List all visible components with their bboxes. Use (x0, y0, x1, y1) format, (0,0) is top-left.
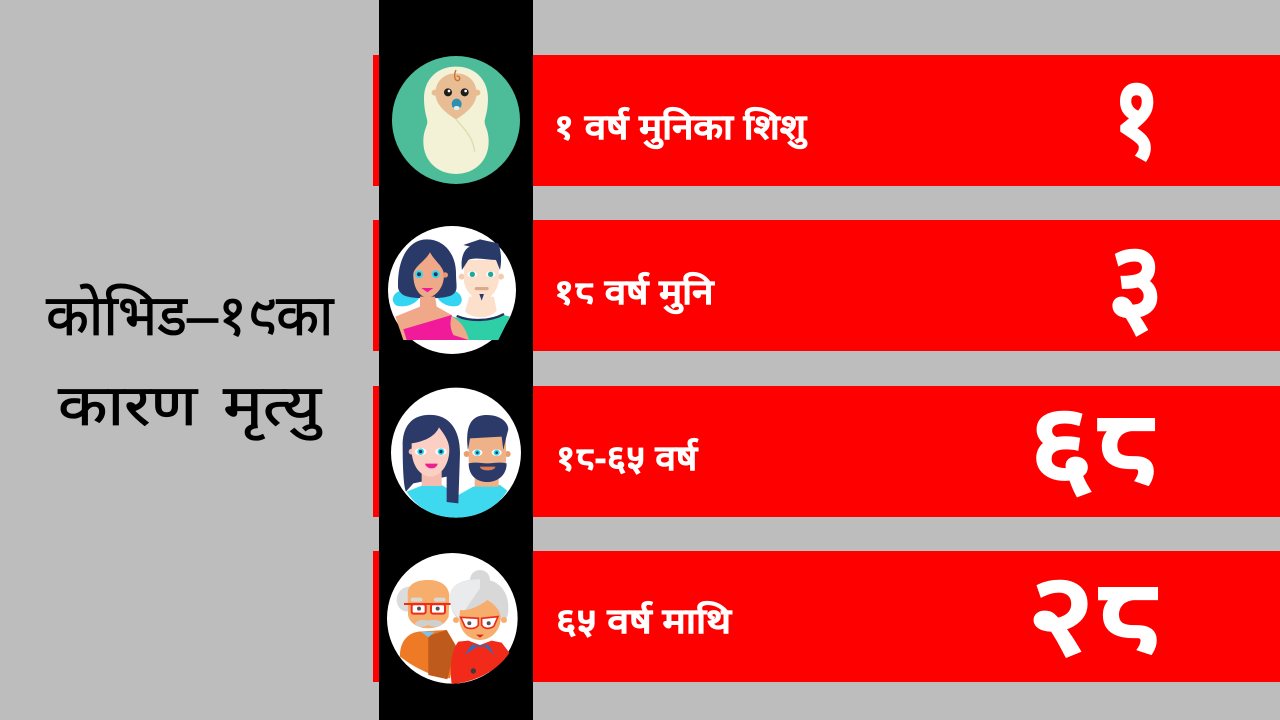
panel: 18 to 65 years (533, 386, 1280, 517)
row accent: under 18 (373, 220, 379, 351)
label: infants: १ वर्ष मुनिका शिशु (554, 108, 806, 147)
title (46, 284, 335, 441)
label: under 18: १८ वर्ष मुनि (554, 273, 713, 312)
number: 1: १ (1112, 55, 1160, 180)
title: कारण (58, 374, 197, 438)
row accent: over 65 (373, 551, 379, 682)
row accent: 18 to 65 (373, 386, 379, 517)
row accent: infants (373, 55, 379, 186)
title: मृत्यु (223, 374, 321, 438)
label: 18 to 65: १८-६५ वर्ष (556, 439, 697, 478)
panel: under 18 years (533, 220, 1280, 351)
number: 3: ३ (1108, 221, 1163, 346)
panel: infants under 1 year (533, 55, 1280, 186)
title: कोभिड–१९का (46, 284, 334, 348)
icon: adult woman and bearded man (391, 388, 521, 518)
number: 28: २८ (1027, 552, 1160, 677)
icon: elderly couple (387, 553, 518, 684)
icon: young woman and man (388, 226, 516, 354)
label: over 65: ६५ वर्ष माथि (556, 602, 731, 641)
number: 68: ६८ (1029, 383, 1157, 508)
black centre column (379, 0, 533, 720)
panel: over 65 years (533, 551, 1280, 682)
icon: swaddled baby (392, 56, 520, 184)
